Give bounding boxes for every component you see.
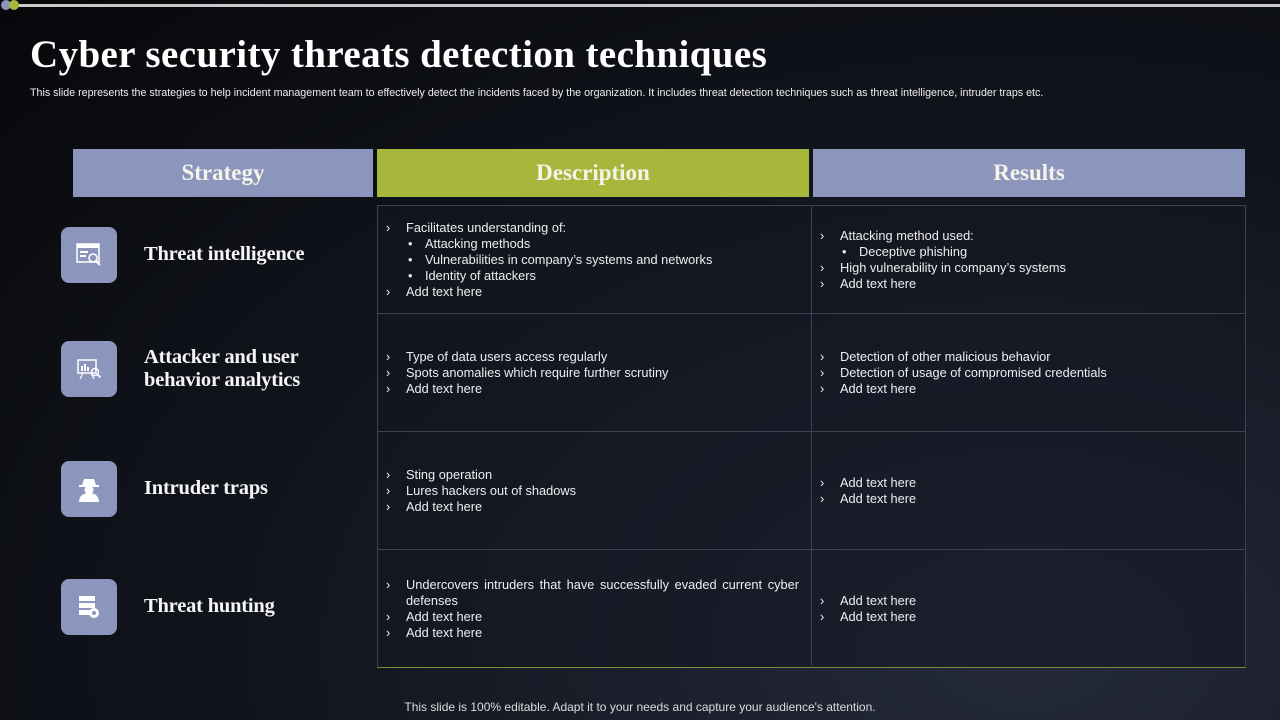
header: Strategy: Strategy	[181, 160, 265, 185]
row 2 description	[377, 313, 812, 432]
row 3 description: Add text here	[406, 498, 482, 514]
row 3 results: Add text here	[840, 474, 916, 490]
row 1 description: Vulnerabilities in company’s systems and networks	[425, 252, 712, 266]
row 1 results	[811, 205, 1246, 314]
strategy: attacker and user behavior analytics: behavior analytics	[144, 369, 300, 391]
title: Cyber security threats detection techniques	[30, 33, 767, 76]
icon: analytics	[61, 341, 117, 397]
icon: intruder	[61, 461, 117, 517]
row 2 results: Detection of other malicious behavior	[840, 348, 1051, 364]
strategy: threat hunting: Threat hunting	[144, 595, 275, 617]
icon: threat hunting	[61, 579, 117, 635]
row 2 results: Add text here	[840, 380, 916, 396]
row 4 results: Add text here	[840, 592, 916, 608]
row 1 results: Deceptive phishing	[859, 244, 967, 258]
strategy: attacker and user behavior analytics	[144, 346, 300, 391]
row 3 results	[811, 431, 1246, 550]
icon: threat intelligence	[61, 227, 117, 283]
row 1 description: Facilitates understanding of:	[406, 220, 566, 234]
row 1 results: Add text here	[840, 276, 916, 290]
row 2 results	[811, 313, 1246, 432]
header: Results: Results	[993, 160, 1065, 185]
strategy: intruder traps: Intruder traps	[144, 477, 268, 499]
row 4 description: Undercovers intruders that have successfully evaded current cyber defenses	[406, 576, 799, 608]
row 4 description: Add text here	[406, 624, 482, 640]
row 4 description	[377, 549, 812, 668]
row 1 results: High vulnerability in company’s systems	[840, 260, 1066, 274]
row 3 description: Lures hackers out of shadows	[406, 482, 576, 498]
header: Strategy	[73, 149, 373, 197]
top decorative line with dots	[1, 0, 1280, 10]
row 4 results	[811, 549, 1246, 668]
row 1 description: Add text here	[406, 284, 482, 298]
row 4 results: Add text here	[840, 608, 916, 624]
subtitle: This slide represents the strategies to help incident management team to effectively detect the incidents faced by the organization. It includes threat detection techniques such as threat intelligence, intruder traps etc.	[30, 87, 1043, 99]
row 1 description	[377, 205, 812, 314]
row 2 results: Detection of usage of compromised credentials	[840, 364, 1107, 380]
row 2 description: Type of data users access regularly	[406, 348, 607, 364]
header: Results	[813, 149, 1245, 197]
row 3 description: Sting operation	[406, 466, 492, 482]
row 4 description: Add text here	[406, 608, 482, 624]
row 2 description: Add text here	[406, 380, 482, 396]
row 3 results: Add text here	[840, 490, 916, 506]
footer note: This slide is 100% editable. Adapt it to your needs and capture your audience's attention.	[404, 700, 876, 714]
row 3 description	[377, 431, 812, 550]
header: Description: Description	[536, 160, 650, 185]
row 1 description: Attacking methods	[425, 236, 530, 250]
header: Description	[377, 149, 809, 197]
row 1 description: Identity of attackers	[425, 268, 536, 282]
row 1 results: Attacking method used:	[840, 228, 974, 242]
strategy: attacker and user behavior analytics: Attacker and user	[144, 346, 299, 368]
strategy: threat intelligence: Threat intelligence	[144, 243, 304, 265]
row 2 description: Spots anomalies which require further scrutiny	[406, 364, 668, 380]
